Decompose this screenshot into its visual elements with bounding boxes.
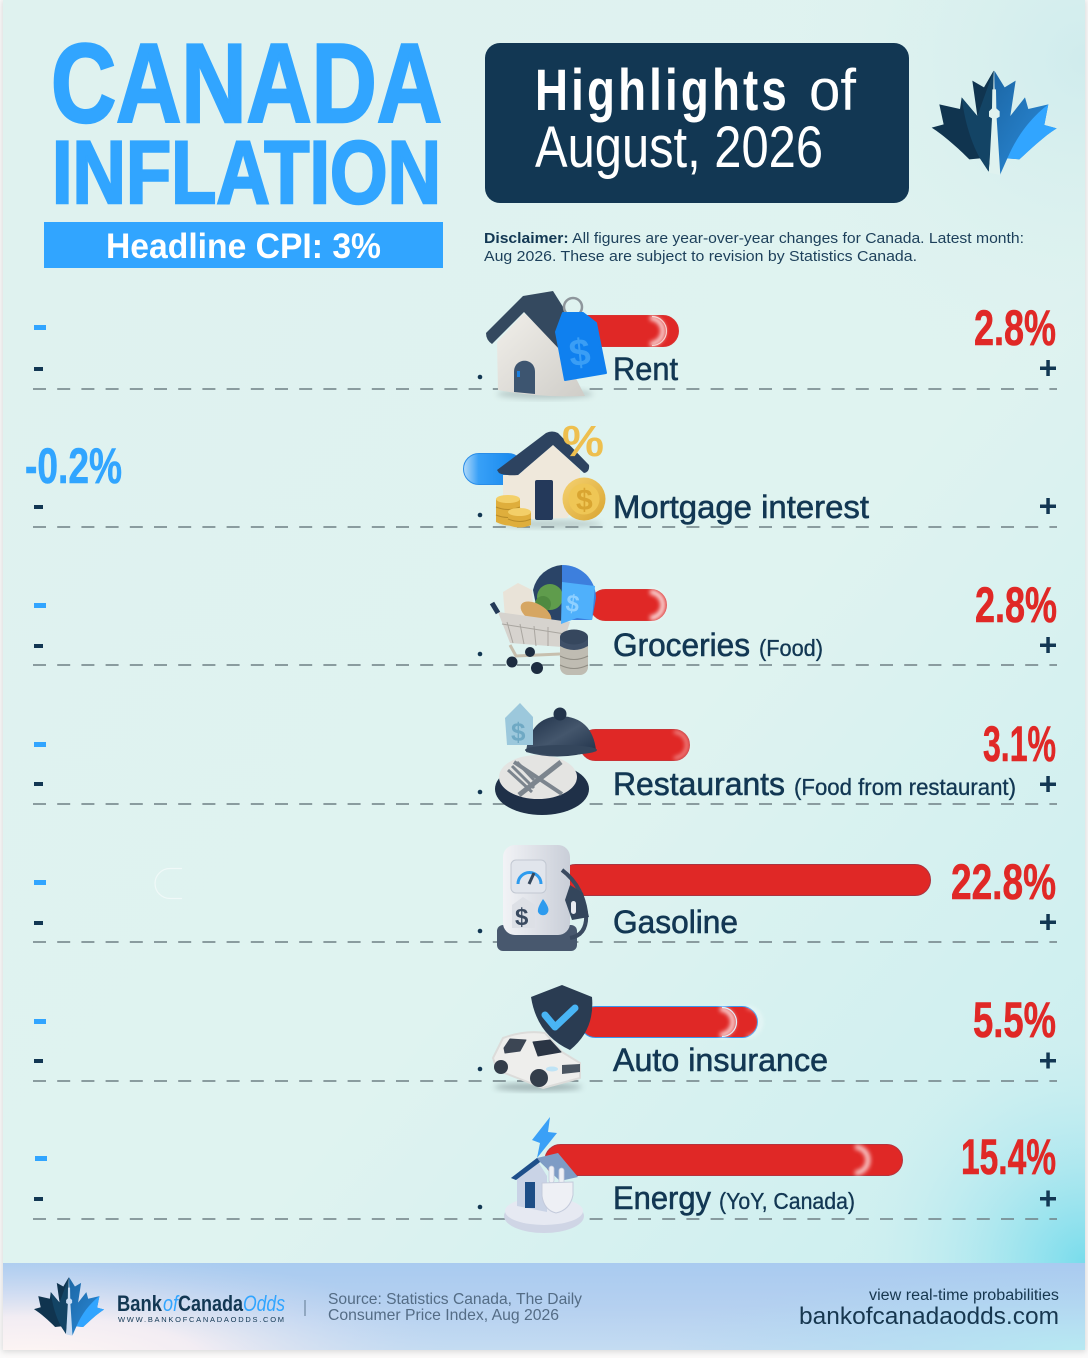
label: Energy (YoY, Canada): (YoY, Canada) — [719, 1188, 855, 1214]
row: Gasoline — [33, 845, 1057, 951]
label: Mortgage interest: Mortgage interest — [613, 489, 869, 525]
row: Auto insurance — [33, 985, 1057, 1091]
footer wordmark: Bank of Canada Odds: Odds — [243, 1291, 285, 1316]
panel: highlights of August 2026: of — [809, 58, 857, 123]
footer link: bankofcanadaodds.com — [799, 1303, 1059, 1330]
footer source text: Source: Statistics Canada, The Daily — [328, 1291, 582, 1308]
row: Mortgage interest — [25, 417, 1057, 528]
label: Energy (YoY, Canada) — [613, 1180, 855, 1216]
bar: Mortgage interest -0.2% — [464, 454, 524, 484]
label: Energy (YoY, Canada): Energy — [613, 1180, 712, 1216]
value: Auto insurance 5.5%: 5.5% — [973, 992, 1056, 1048]
label: Groceries (Food): Groceries — [613, 627, 750, 663]
row: Rent — [33, 291, 1057, 399]
bar: Gasoline 22.8% — [560, 864, 930, 896]
label: Restaurants (Food from restaurant) — [613, 766, 1016, 802]
icon: grocery cart with coins — [492, 565, 596, 675]
footer logo: maple leaf — [34, 1277, 104, 1336]
bar: Restaurants 3.1% — [580, 730, 690, 760]
disclaimer text: Disclaimer: All figures are year-over-year changes for Canada. Latest month: — [484, 230, 1024, 247]
disclaimer text — [484, 230, 1024, 265]
title: Canada Inflation: CANADA — [51, 21, 442, 146]
footer link — [799, 1287, 1059, 1330]
value: Groceries 2.8%: 2.8% — [975, 577, 1057, 633]
label: Restaurants (Food from restaurant): (Food from restaurant) — [794, 774, 1016, 800]
icon: house with percent and coins: $ — [576, 484, 593, 517]
icon: house with price tag — [486, 291, 606, 399]
panel: highlights of August 2026: August, 2026 — [535, 115, 823, 180]
footer wordmark: Bank of Canada Odds: of — [163, 1291, 180, 1316]
footer source text — [328, 1291, 582, 1324]
icon: cloche and plate: $ — [511, 717, 526, 747]
title: Canada Inflation — [51, 21, 442, 222]
row: Groceries — [33, 565, 1057, 675]
icon: house with price tag: $ — [567, 331, 592, 375]
footer source text: Consumer Price Index, Aug 2026 — [328, 1307, 559, 1324]
icon: car with shield — [493, 985, 592, 1091]
footer — [3, 1263, 1085, 1350]
bar: Energy 15.4% — [545, 1144, 902, 1176]
value: Rent 2.8%: 2.8% — [974, 300, 1056, 356]
headline CPI banner — [44, 222, 443, 268]
headline CPI banner: Headline CPI: 3% — [106, 227, 381, 266]
icon: cloche and plate — [495, 703, 597, 815]
icon: grocery cart with coins: $ — [564, 590, 582, 619]
bar: Auto insurance 5.5% — [580, 1006, 761, 1038]
bar: Rent 2.8% — [570, 316, 678, 346]
icon: gas pump: $ — [515, 904, 529, 931]
title: Canada Inflation: INFLATION — [52, 122, 441, 222]
row: Restaurants — [33, 703, 1057, 815]
row: Energy — [33, 1117, 1057, 1233]
panel: highlights of August 2026 — [485, 43, 909, 203]
panel: highlights of August 2026: Highlights — [535, 58, 790, 123]
footer wordmark: Bank of Canada Odds: Bank — [117, 1291, 163, 1316]
label: Groceries (Food): (Food) — [759, 635, 823, 661]
icon: maple leaf logo with tower — [932, 71, 1057, 175]
footer wordmark: Bank of Canada Odds: WWW.BANKOFCANADAODDS.COM — [118, 1315, 284, 1324]
label: Gasoline: Gasoline — [613, 904, 738, 940]
footer wordmark: Bank of Canada Odds: Canada — [178, 1291, 244, 1316]
disclaimer text: Aug 2026. These are subject to revision by Statistics Canada. — [484, 248, 917, 265]
icon: house with percent and coins: % — [562, 417, 604, 466]
footer link: view real-time probabilities — [869, 1287, 1059, 1304]
label: Restaurants (Food from restaurant): Restaurants — [613, 766, 785, 802]
icon: gas pump — [497, 845, 589, 951]
label: Auto insurance: Auto insurance — [613, 1042, 828, 1078]
icon: house with plug and lightning bolt — [504, 1117, 584, 1233]
label: Rent: Rent — [613, 351, 678, 387]
icon: house with percent and coins — [496, 417, 606, 528]
value: Mortgage interest -0.2%: -0.2% — [25, 438, 122, 494]
footer wordmark: Bank of Canada Odds — [117, 1291, 285, 1324]
label: Groceries (Food) — [613, 627, 823, 663]
bar: Groceries 2.8% — [590, 590, 666, 620]
